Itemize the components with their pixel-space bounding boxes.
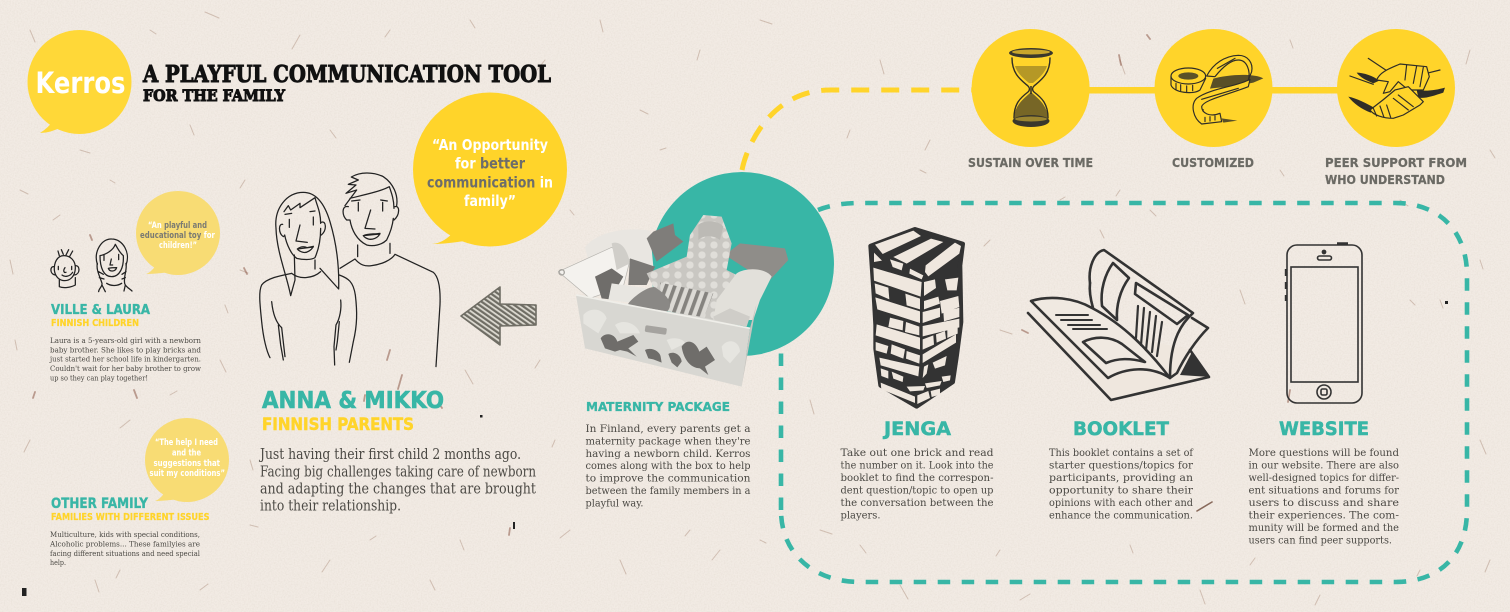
logo bubble (28, 30, 132, 134)
text: booklet: opportunity to share their (1049, 484, 1194, 496)
text: booklet: starter questions/topics for (1049, 460, 1194, 472)
yellow dashed connector (742, 90, 972, 170)
yellow connector line between value circles (1085, 87, 1345, 94)
title: A PLAYFUL COMMUNICATION TOOL (142, 61, 551, 88)
text: Anna and Mikko: Just having their first child 2 months ago. (258, 447, 521, 463)
icon: handshake (1348, 58, 1445, 118)
arrow: hatched left arrow (461, 287, 536, 345)
title: FOR THE FAMILY (143, 86, 286, 105)
text: website: users can find peer supports. (1248, 534, 1392, 546)
text: booklet: participants, providing an (1049, 472, 1193, 484)
text: website: ent situations and forums for (1248, 484, 1400, 496)
icon: boy and girl line drawing (51, 239, 132, 292)
text: Anna and Mikko: FINNISH PARENTS (262, 415, 414, 435)
text: jenga (840, 418, 994, 522)
speech bubble: opportunity: for better (455, 155, 526, 173)
value: sustain over time: SUSTAIN OVER TIME (968, 156, 1093, 170)
man (345, 173, 397, 208)
text: other family: OTHER FAMILY (51, 496, 149, 512)
value: customized: CUSTOMIZED (1172, 156, 1254, 170)
text: jenga: booklet to find the correspon- (840, 472, 994, 484)
speech bubble: other family: “The help I need (155, 438, 218, 448)
text: maternity package: maternity package when they're (586, 435, 750, 447)
text: Ville and Laura: baby brother. She likes to play bricks and (50, 345, 201, 354)
woman (276, 192, 339, 296)
icon: smartphone (1286, 244, 1362, 403)
text: jenga: JENGA (882, 418, 951, 440)
value: peer support (1325, 29, 1467, 187)
value: peer support: WHO UNDERSTAND (1325, 173, 1445, 187)
box illustrations (601, 334, 715, 375)
text: maternity package: MATERNITY PACKAGE (586, 399, 730, 414)
text: Ville and Laura: Couldn't wait for her baby brother to grow (50, 364, 201, 373)
icon: jenga tower (871, 229, 963, 406)
text: maternity package: having a newborn child. Kerros (586, 448, 750, 460)
text: Ville and Laura: just started her school life in kindergarten. (49, 355, 201, 364)
text: booklet: enhance the communication. (1049, 510, 1193, 522)
maternity box image (558, 215, 788, 387)
text: website: their experiences. The com- (1248, 510, 1399, 522)
text: other family (49, 496, 209, 567)
speech bubble: opportunity: communication in (427, 174, 553, 192)
text: jenga: dent question/topic to open up (840, 484, 994, 496)
text: website (1248, 418, 1400, 546)
teal dashed frame (781, 203, 1467, 582)
text: website: More questions will be found (1248, 447, 1399, 459)
text: jenga: the conversation between the (840, 497, 994, 509)
icon: open booklet (1028, 250, 1210, 400)
box body (576, 295, 750, 387)
value: customized (1154, 29, 1272, 170)
speech bubble: children: educational toy for (140, 231, 216, 241)
speech bubble: other family (145, 418, 229, 502)
text: Ville and Laura (49, 303, 201, 382)
speech bubble: other family: suit my conditions” (150, 469, 225, 479)
logo bubble: Kerros (36, 66, 126, 100)
text: maternity package: comes along with the box to help (586, 460, 751, 472)
text: other family: Alcoholic problems... These familyies are (49, 539, 200, 548)
text: booklet: BOOKLET (1073, 418, 1169, 440)
text: Anna and Mikko: ANNA & MIKKO (262, 388, 444, 414)
text: Ville and Laura: Laura is a 5-years-old girl with a newborn (50, 336, 201, 345)
text: maternity package: between the family members in a (586, 485, 750, 497)
text: website: WEBSITE (1279, 418, 1369, 440)
speech bubble: children: children!” (159, 241, 197, 251)
title (142, 61, 551, 105)
text: website: in our website. There are also (1248, 460, 1399, 472)
text: other family: help. (50, 558, 66, 567)
text: Anna and Mikko: and adapting the changes that are brought (260, 482, 536, 498)
icon: measuring tape (1171, 55, 1263, 124)
text: booklet (1049, 418, 1194, 522)
text: booklet: opinions with each other and (1049, 497, 1193, 509)
text: maternity package (586, 399, 751, 509)
icon: Anna and Mikko line drawing (260, 173, 440, 367)
text: maternity package: In Finland, every parents get a (586, 423, 750, 435)
text: Ville and Laura: up so they can play together! (50, 373, 148, 382)
text: other family: facing different situations and need special (50, 549, 201, 558)
text: Anna and Mikko (258, 388, 536, 514)
speech bubble: opportunity (413, 92, 567, 246)
value: peer support: PEER SUPPORT FROM (1325, 156, 1467, 170)
text: website: users to discuss and share (1248, 497, 1399, 509)
text: other family: FAMILIES WITH DIFFERENT ISSUES (51, 512, 210, 523)
speech bubble: other family: and the (172, 448, 201, 458)
teal circle behind box (650, 172, 834, 356)
speech bubble: children (136, 191, 220, 275)
text: website: well-designed topics for differ- (1248, 472, 1399, 484)
box contents (585, 229, 653, 267)
text: maternity package: to improve the communication (586, 473, 751, 485)
text: jenga: Take out one brick and read (840, 447, 994, 459)
text: Anna and Mikko: into their relationship. (260, 498, 401, 514)
text: Anna and Mikko: Facing big challenges taking care of newborn (260, 464, 536, 480)
speech bubble: children: “An playful and (148, 221, 207, 231)
text: maternity package: playful way. (586, 497, 644, 509)
speech bubble: opportunity: “An Opportunity (432, 136, 548, 154)
speech bubble: opportunity: family” (464, 192, 516, 210)
text: Ville and Laura: FINNISH CHILDREN (51, 318, 139, 329)
text: booklet: This booklet contains a set of (1049, 447, 1194, 459)
text: website: munity will be formed and the (1248, 522, 1399, 534)
speech bubble: other family: suggestions that (154, 459, 220, 469)
value: sustain over time (968, 29, 1093, 170)
text: other family: Multiculture, kids with special conditions, (50, 530, 200, 539)
text: Ville and Laura: VILLE & LAURA (51, 303, 150, 318)
text: jenga: players. (840, 510, 880, 522)
icon: hourglass (1009, 48, 1053, 127)
text: jenga: the number on it. Look into the (840, 460, 994, 472)
